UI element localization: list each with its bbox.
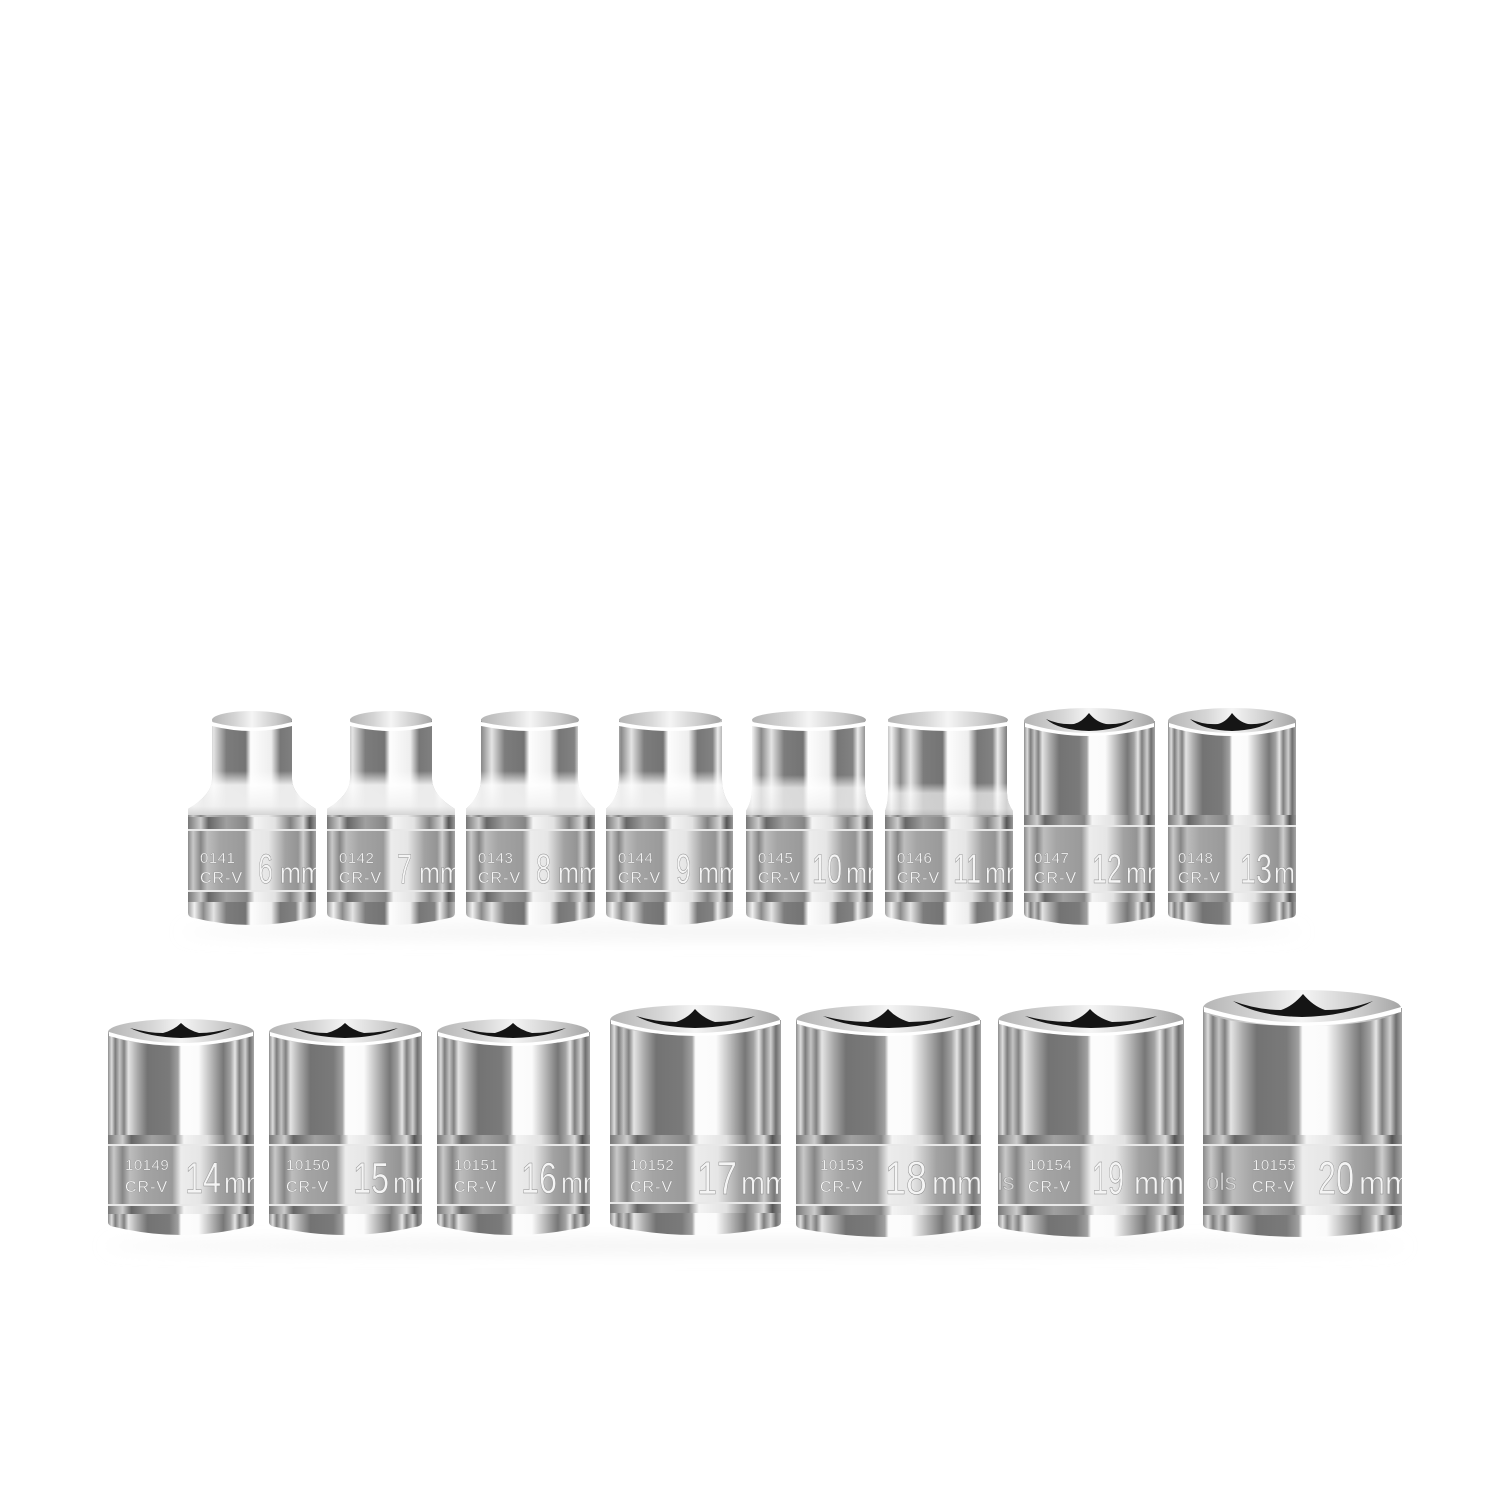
socket 16mm: CR-V: [454, 1179, 497, 1196]
socket 10mm: 0145: [758, 850, 793, 867]
socket 11mm: CR-V: [897, 870, 940, 887]
socket 13mm: 13: [1240, 845, 1272, 892]
socket 19mm: ols: [984, 1169, 1015, 1196]
socket 14mm: 14: [185, 1154, 221, 1203]
socket 7mm: CR-V: [339, 870, 382, 887]
socket 9mm: 0144: [618, 850, 653, 867]
socket 20mm: [1203, 990, 1411, 1237]
socket 12mm: 12: [1092, 845, 1122, 892]
socket 15mm: 15: [353, 1154, 389, 1203]
socket 17mm: 17: [697, 1152, 737, 1204]
socket 19mm: [984, 1005, 1184, 1237]
socket 18mm: [796, 1005, 982, 1237]
socket 13mm: [1168, 708, 1316, 925]
socket 12mm: [1024, 708, 1168, 925]
socket 16mm: 10151: [454, 1157, 498, 1174]
socket 10mm: 10: [812, 845, 842, 892]
floor shadow: top row: [182, 927, 1302, 937]
socket 6mm: CR-V: [200, 870, 243, 887]
socket 20mm: mm: [1359, 1165, 1411, 1201]
socket 8mm: 8: [536, 845, 551, 892]
socket 9mm: [606, 711, 740, 925]
socket 9mm: CR-V: [618, 870, 661, 887]
socket 8mm: CR-V: [478, 870, 521, 887]
socket 15mm: [269, 1019, 437, 1235]
socket 20mm: CR-V: [1252, 1179, 1295, 1196]
socket 8mm: 0143: [478, 850, 513, 867]
socket 12mm: CR-V: [1034, 870, 1077, 887]
socket 13mm: CR-V: [1178, 870, 1221, 887]
socket 11mm: [885, 711, 1027, 925]
socket 18mm: 10153: [820, 1157, 864, 1174]
socket 18mm: 18: [885, 1152, 927, 1204]
socket 12mm: 0147: [1034, 850, 1069, 867]
socket 10mm: CR-V: [758, 870, 801, 887]
socket 8mm: [466, 711, 600, 925]
socket 13mm: 0148: [1178, 850, 1213, 867]
socket 16mm: [437, 1019, 605, 1235]
floor shadow: bottom row: [105, 1241, 1405, 1251]
socket 19mm: 19: [1092, 1152, 1124, 1204]
socket 9mm: 9: [676, 845, 691, 892]
socket 20mm: 20: [1318, 1152, 1354, 1204]
socket 7mm: 7: [397, 845, 412, 892]
socket 10mm: [746, 711, 888, 925]
socket 6mm: [188, 711, 322, 925]
socket 17mm: [610, 1005, 789, 1235]
socket 14mm: [108, 1019, 268, 1235]
socket 6mm: 0141: [200, 850, 235, 867]
socket 7mm: 0142: [339, 850, 374, 867]
socket 15mm: 10150: [286, 1157, 330, 1174]
socket 14mm: 10149: [125, 1157, 169, 1174]
socket 14mm: CR-V: [125, 1179, 168, 1196]
socket 6mm: 6: [258, 845, 273, 892]
socket 17mm: 10152: [630, 1157, 674, 1174]
socket 7mm: [327, 711, 461, 925]
socket 18mm: CR-V: [820, 1179, 863, 1196]
socket 11mm: 11: [953, 845, 981, 892]
socket 20mm: ols: [1206, 1169, 1237, 1196]
socket 11mm: 0146: [897, 850, 932, 867]
socket 15mm: CR-V: [286, 1179, 329, 1196]
socket 19mm: 10154: [1028, 1157, 1072, 1174]
socket 16mm: 16: [521, 1154, 557, 1203]
socket 17mm: CR-V: [630, 1179, 673, 1196]
socket 19mm: CR-V: [1028, 1179, 1071, 1196]
socket 20mm: 10155: [1252, 1157, 1296, 1174]
